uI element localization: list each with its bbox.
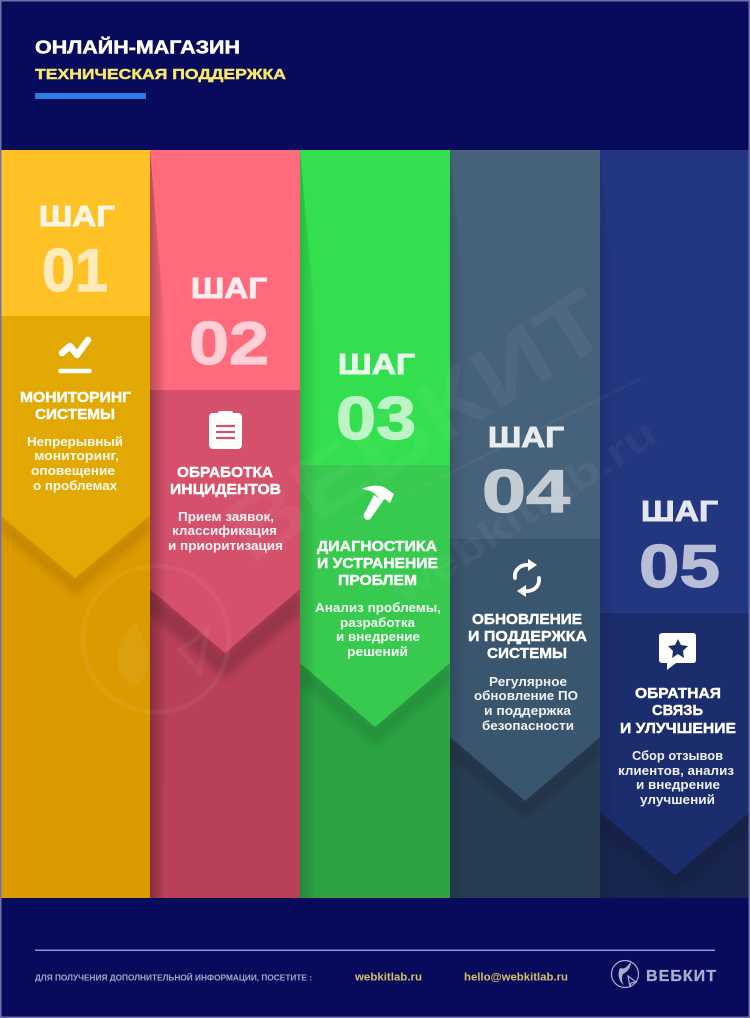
heading 1 — [20, 392, 131, 420]
step number 1: 01 — [42, 237, 108, 304]
heading 5: СВЯЗЬ — [652, 703, 703, 719]
description 3: и внедрение — [336, 629, 420, 644]
subtitle: ТЕХНИЧЕСКАЯ ПОДДЕРЖКА — [35, 66, 286, 83]
accent bar — [35, 93, 146, 99]
heading 4: СИСТЕМЫ — [487, 646, 567, 662]
heading 2: ОБРАБОТКА — [177, 465, 273, 481]
watermark — [83, 269, 665, 712]
heading 5: ОБРАТНАЯ — [635, 686, 721, 702]
icon: hammer — [362, 486, 394, 520]
description 4: и поддержка — [484, 703, 572, 718]
website: webkitlab.ru — [354, 972, 422, 984]
step label 2: ШАГ — [191, 273, 267, 305]
panel: step 5 — [600, 150, 750, 898]
heading 4 — [468, 614, 587, 658]
description 1 — [27, 434, 123, 493]
description 5: и внедрение — [636, 777, 720, 792]
heading 2 — [170, 465, 281, 498]
description 2: классификация — [172, 523, 277, 538]
title: ОНЛАЙН-МАГАЗИН — [35, 36, 240, 58]
icon: refresh arrows — [515, 559, 539, 597]
email: hello@webkitlab.ru — [464, 972, 568, 984]
step number 3: 03 — [336, 385, 416, 452]
heading 3 — [317, 539, 438, 589]
description 2: Прием заявок, — [178, 509, 274, 524]
description 2: и приоритизация — [168, 538, 283, 553]
step number 4: 04 — [482, 458, 571, 525]
description 3: Анализ проблемы, — [315, 600, 441, 615]
footer — [35, 950, 716, 988]
footer note: ДЛЯ ПОЛУЧЕНИЯ ДОПОЛНИТЕЛЬНОЙ ИНФОРМАЦИИ, ПОСЕТИТЕ : — [35, 972, 312, 982]
heading 5: И УЛУЧШЕНИЕ — [620, 721, 736, 737]
description 5: Сбор отзывов — [632, 748, 723, 763]
description 5: улучшений — [640, 792, 715, 807]
description 3 — [315, 600, 441, 659]
watermark: ВЕБКИТ — [208, 269, 625, 581]
description 3: решений — [347, 644, 408, 659]
step number 2: 02 — [189, 310, 269, 377]
description 4 — [474, 677, 578, 730]
step label 4: ШАГ — [488, 422, 564, 454]
column edge shadows — [150, 150, 618, 898]
panel: step 3 — [300, 150, 450, 898]
icon: logo — [612, 960, 638, 988]
description 5 — [618, 748, 735, 807]
step label 1: ШАГ — [39, 201, 115, 233]
heading 1: МОНИТОРИНГ — [20, 390, 132, 406]
heading 4: И ПОДДЕРЖКА — [468, 629, 587, 645]
icon: clipboard — [209, 411, 242, 449]
step label 5: ШАГ — [641, 496, 718, 528]
heading 3: И УСТРАНЕНИЕ — [317, 556, 438, 572]
heading 1: СИСТЕМЫ — [35, 407, 115, 423]
heading 3: ПРОБЛЕМ — [338, 573, 417, 589]
description 1: Непрерывный — [27, 434, 123, 449]
description 1: оповещение — [31, 463, 115, 478]
panel: step 1 — [0, 150, 150, 898]
icon: speech bubble with star — [659, 633, 696, 670]
description 1: о проблемах — [33, 478, 118, 493]
heading 2: ИНЦИДЕНТОВ — [170, 482, 281, 498]
heading 4: ОБНОВЛЕНИЕ — [472, 612, 582, 628]
icon: trend line — [60, 340, 90, 371]
step label 3: ШАГ — [338, 349, 415, 381]
step number 5: 05 — [639, 533, 720, 600]
description 2 — [168, 509, 283, 553]
heading 3: ДИАГНОСТИКА — [317, 539, 437, 555]
description 5: клиентов, анализ — [618, 763, 735, 778]
watermark: webkitlab.ru — [384, 411, 665, 614]
heading 5 — [620, 688, 736, 734]
description 4: Регулярное — [489, 674, 567, 689]
description 4: безопасности — [482, 718, 574, 733]
description 3: разработка — [340, 615, 416, 630]
description 1: мониторинг, — [34, 448, 119, 463]
panel: step 4 — [450, 150, 600, 898]
header — [35, 36, 286, 99]
description 4: обновление ПО — [474, 688, 578, 703]
logo wordmark: ВЕБКИТ — [646, 968, 716, 985]
footer divider — [35, 950, 715, 951]
panel: step 2 — [150, 150, 300, 898]
